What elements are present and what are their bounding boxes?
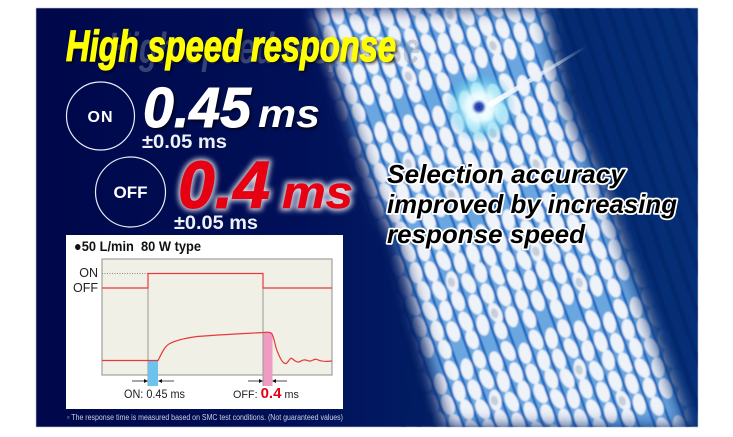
- ON indicator: [66, 82, 134, 150]
- OFF response time: ms: [282, 167, 353, 218]
- callout: selection accuracy: improved by increasing: [387, 189, 677, 219]
- signal line: [102, 274, 332, 288]
- off interval highlight: [264, 333, 272, 386]
- footnote: ▫ The response time is measured based on SMC test conditions. (Not guaranteed values): [67, 413, 343, 422]
- OFF response time: ±0.05 ms: [174, 213, 258, 234]
- callout: selection accuracy: response speed: [387, 219, 586, 249]
- on interval highlight: [148, 360, 158, 386]
- plot area: [102, 259, 332, 375]
- ON indicator: ON: [88, 109, 114, 126]
- timing arrows: [132, 379, 287, 383]
- ON response time: [142, 76, 321, 153]
- woven fabric band: [290, 8, 698, 427]
- callout: selection accuracy: [387, 159, 677, 249]
- ON response time: ms: [259, 95, 321, 138]
- ON response time: ±0.05 ms: [142, 132, 227, 153]
- axis labels: [73, 266, 98, 295]
- OFF response time: [174, 148, 353, 234]
- axis labels: ON: [79, 266, 98, 280]
- axis labels: OFF: [73, 281, 98, 295]
- chart heading: ●50 L/min 80 W type: [74, 238, 201, 254]
- on time label: ON: 0.45 ms: [124, 389, 185, 401]
- OFF response time: 0.4: [178, 148, 270, 223]
- OFF response time: 0.4: [178, 148, 270, 223]
- OFF response time: ms: [282, 167, 353, 218]
- off time label: OFF: 0.4 ms: [233, 385, 299, 402]
- ON response time: 0.45: [145, 78, 254, 142]
- title: High speed response: [66, 22, 396, 71]
- time guides: [102, 273, 263, 386]
- panel: response chart: [66, 235, 343, 409]
- ON response time: 0.45: [143, 76, 252, 140]
- icon: spark of light on the fabric: [444, 46, 586, 143]
- title: High speed response: [68, 24, 398, 73]
- OFF indicator: OFF: [114, 183, 148, 202]
- callout: selection accuracy: Selection accuracy: [387, 159, 627, 189]
- title: ghost reflection: High speed response: [108, 24, 420, 73]
- response curve: [102, 332, 332, 364]
- OFF indicator: [96, 157, 166, 227]
- ON response time: ms: [258, 93, 320, 136]
